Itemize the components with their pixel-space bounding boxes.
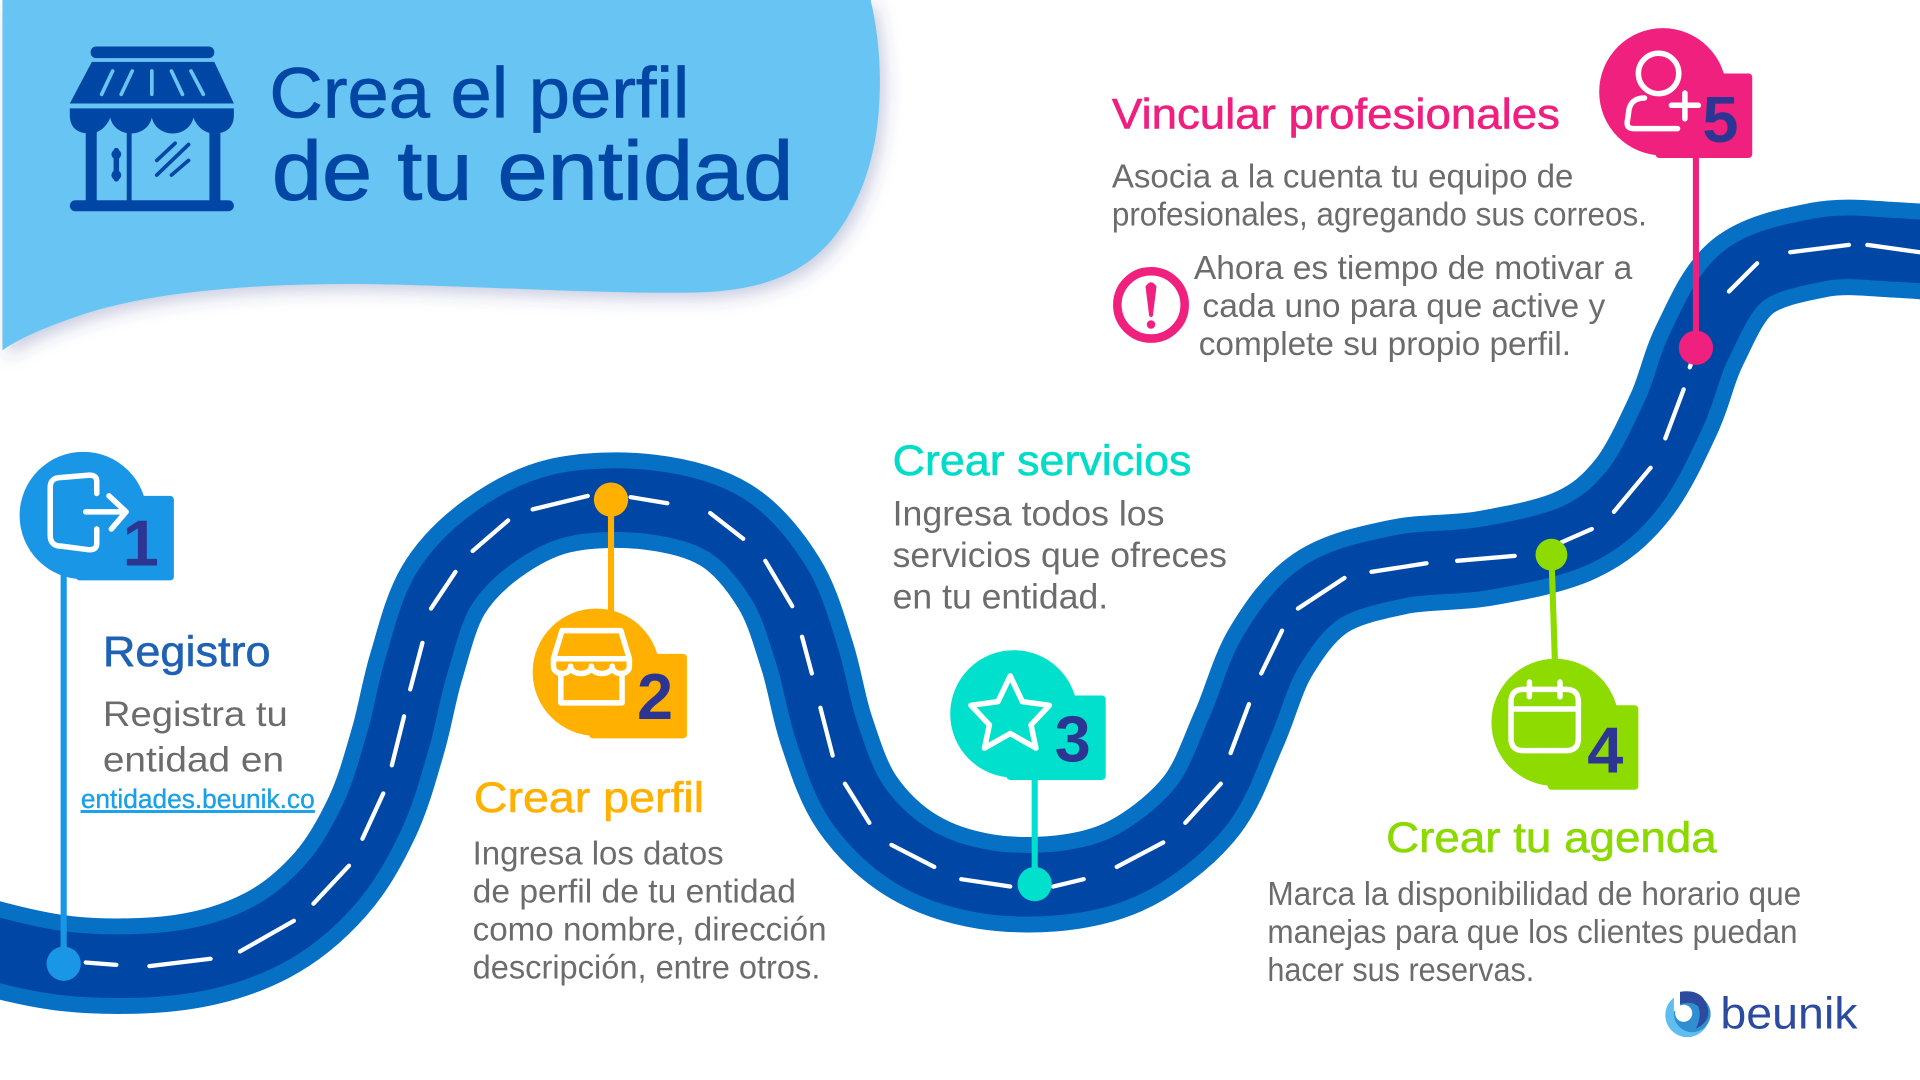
step 1 heading: Registro	[103, 628, 271, 676]
step 3 body: servicios que ofreces	[893, 535, 1227, 575]
step 1 text	[81, 628, 315, 814]
road	[0, 245, 1920, 966]
step 2 body: Ingresa los datos	[473, 835, 724, 872]
icon: storefront	[70, 47, 234, 211]
step 4 pin	[1491, 539, 1638, 790]
step 4 body	[1267, 876, 1801, 989]
number 1: 1	[123, 507, 159, 580]
step 1 link: entidades.beunik.co	[81, 784, 315, 814]
step 5 note: complete su propio perfil.	[1199, 326, 1571, 363]
step 5 pin	[1599, 28, 1752, 365]
icon: user plus	[1627, 93, 1698, 129]
step 1 pin	[20, 452, 174, 981]
number 3: 3	[1055, 703, 1091, 776]
icon: star	[971, 676, 1049, 748]
step 3 heading: Crear servicios	[893, 437, 1191, 485]
step 4 body: hacer sus reservas.	[1267, 952, 1534, 989]
step 5 note: Ahora es tiempo de motivar a	[1194, 250, 1633, 287]
number 2: 2	[637, 660, 673, 733]
icon: exclamation	[1117, 271, 1185, 339]
title	[269, 55, 793, 218]
step 4 heading: Crear tu agenda	[1386, 814, 1717, 862]
step 3 body: Ingresa todos los	[893, 493, 1164, 533]
icon: exit door	[50, 475, 126, 550]
step 1 body: Registra tu	[103, 694, 288, 734]
icon: calendar	[1511, 682, 1578, 751]
number 4: 4	[1587, 714, 1623, 787]
step 5 body	[1112, 158, 1647, 233]
step 4 text	[1267, 814, 1801, 989]
step 5 body: Asocia a la cuenta tu equipo de	[1112, 158, 1573, 195]
step 2 body: de perfil de tu entidad	[473, 873, 796, 910]
step 2 body: descripción, entre otros.	[473, 949, 820, 986]
logo wordmark: beunik	[1720, 990, 1859, 1039]
step 2 text	[473, 774, 827, 986]
title line 2: de tu entidad	[272, 125, 793, 218]
step 1 body	[103, 694, 288, 779]
step 4 body: manejas para que los clientes puedan	[1267, 914, 1798, 951]
step 5 note	[1194, 250, 1633, 363]
step 3 body	[893, 493, 1227, 617]
step 2 pin	[533, 482, 687, 738]
icon: shop outline	[553, 631, 629, 703]
step 3 pin	[950, 650, 1106, 901]
step 2 body: como nombre, dirección	[473, 911, 827, 948]
step 1 body: entidad en	[103, 739, 284, 779]
step 2 heading: Crear perfil	[474, 774, 704, 822]
step 2 body	[473, 835, 827, 986]
step 4 body: Marca la disponibilidad de horario que	[1267, 876, 1801, 913]
title line 1: Crea el perfil	[269, 55, 689, 134]
step 5 body: profesionales, agregando sus correos.	[1112, 196, 1647, 233]
number 5: 5	[1702, 83, 1738, 156]
step 3 text	[893, 437, 1227, 617]
step 5 note: cada uno para que active y	[1202, 288, 1606, 325]
step 3 body: en tu entidad.	[893, 577, 1108, 617]
step 5 heading: Vincular profesionales	[1112, 91, 1560, 139]
step 5 text	[1112, 91, 1647, 363]
header blob	[2, 0, 880, 350]
logo: beunik	[1665, 990, 1859, 1039]
